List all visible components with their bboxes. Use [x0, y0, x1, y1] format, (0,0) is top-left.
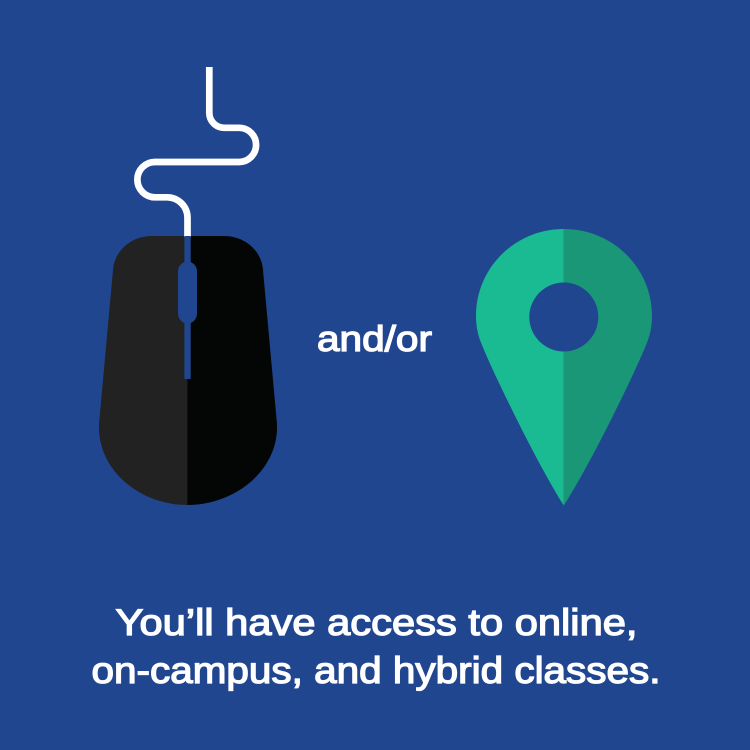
caption line 2: on-campus, and hybrid classes. [92, 650, 660, 691]
mouse cord [137, 67, 256, 237]
mouse body right half [187, 236, 277, 505]
mouse cord groove and scroll wheel [178, 236, 197, 379]
icon: computer mouse [99, 67, 277, 505]
caption text [92, 602, 660, 691]
pin hole [529, 282, 598, 352]
pin right half [564, 229, 652, 506]
caption line 1: You’ll have access to online, [116, 602, 638, 643]
icon: location pin [476, 229, 652, 506]
pin left half [476, 229, 564, 506]
mouse body left half [99, 236, 187, 505]
label: and/or: and/or [317, 318, 432, 359]
